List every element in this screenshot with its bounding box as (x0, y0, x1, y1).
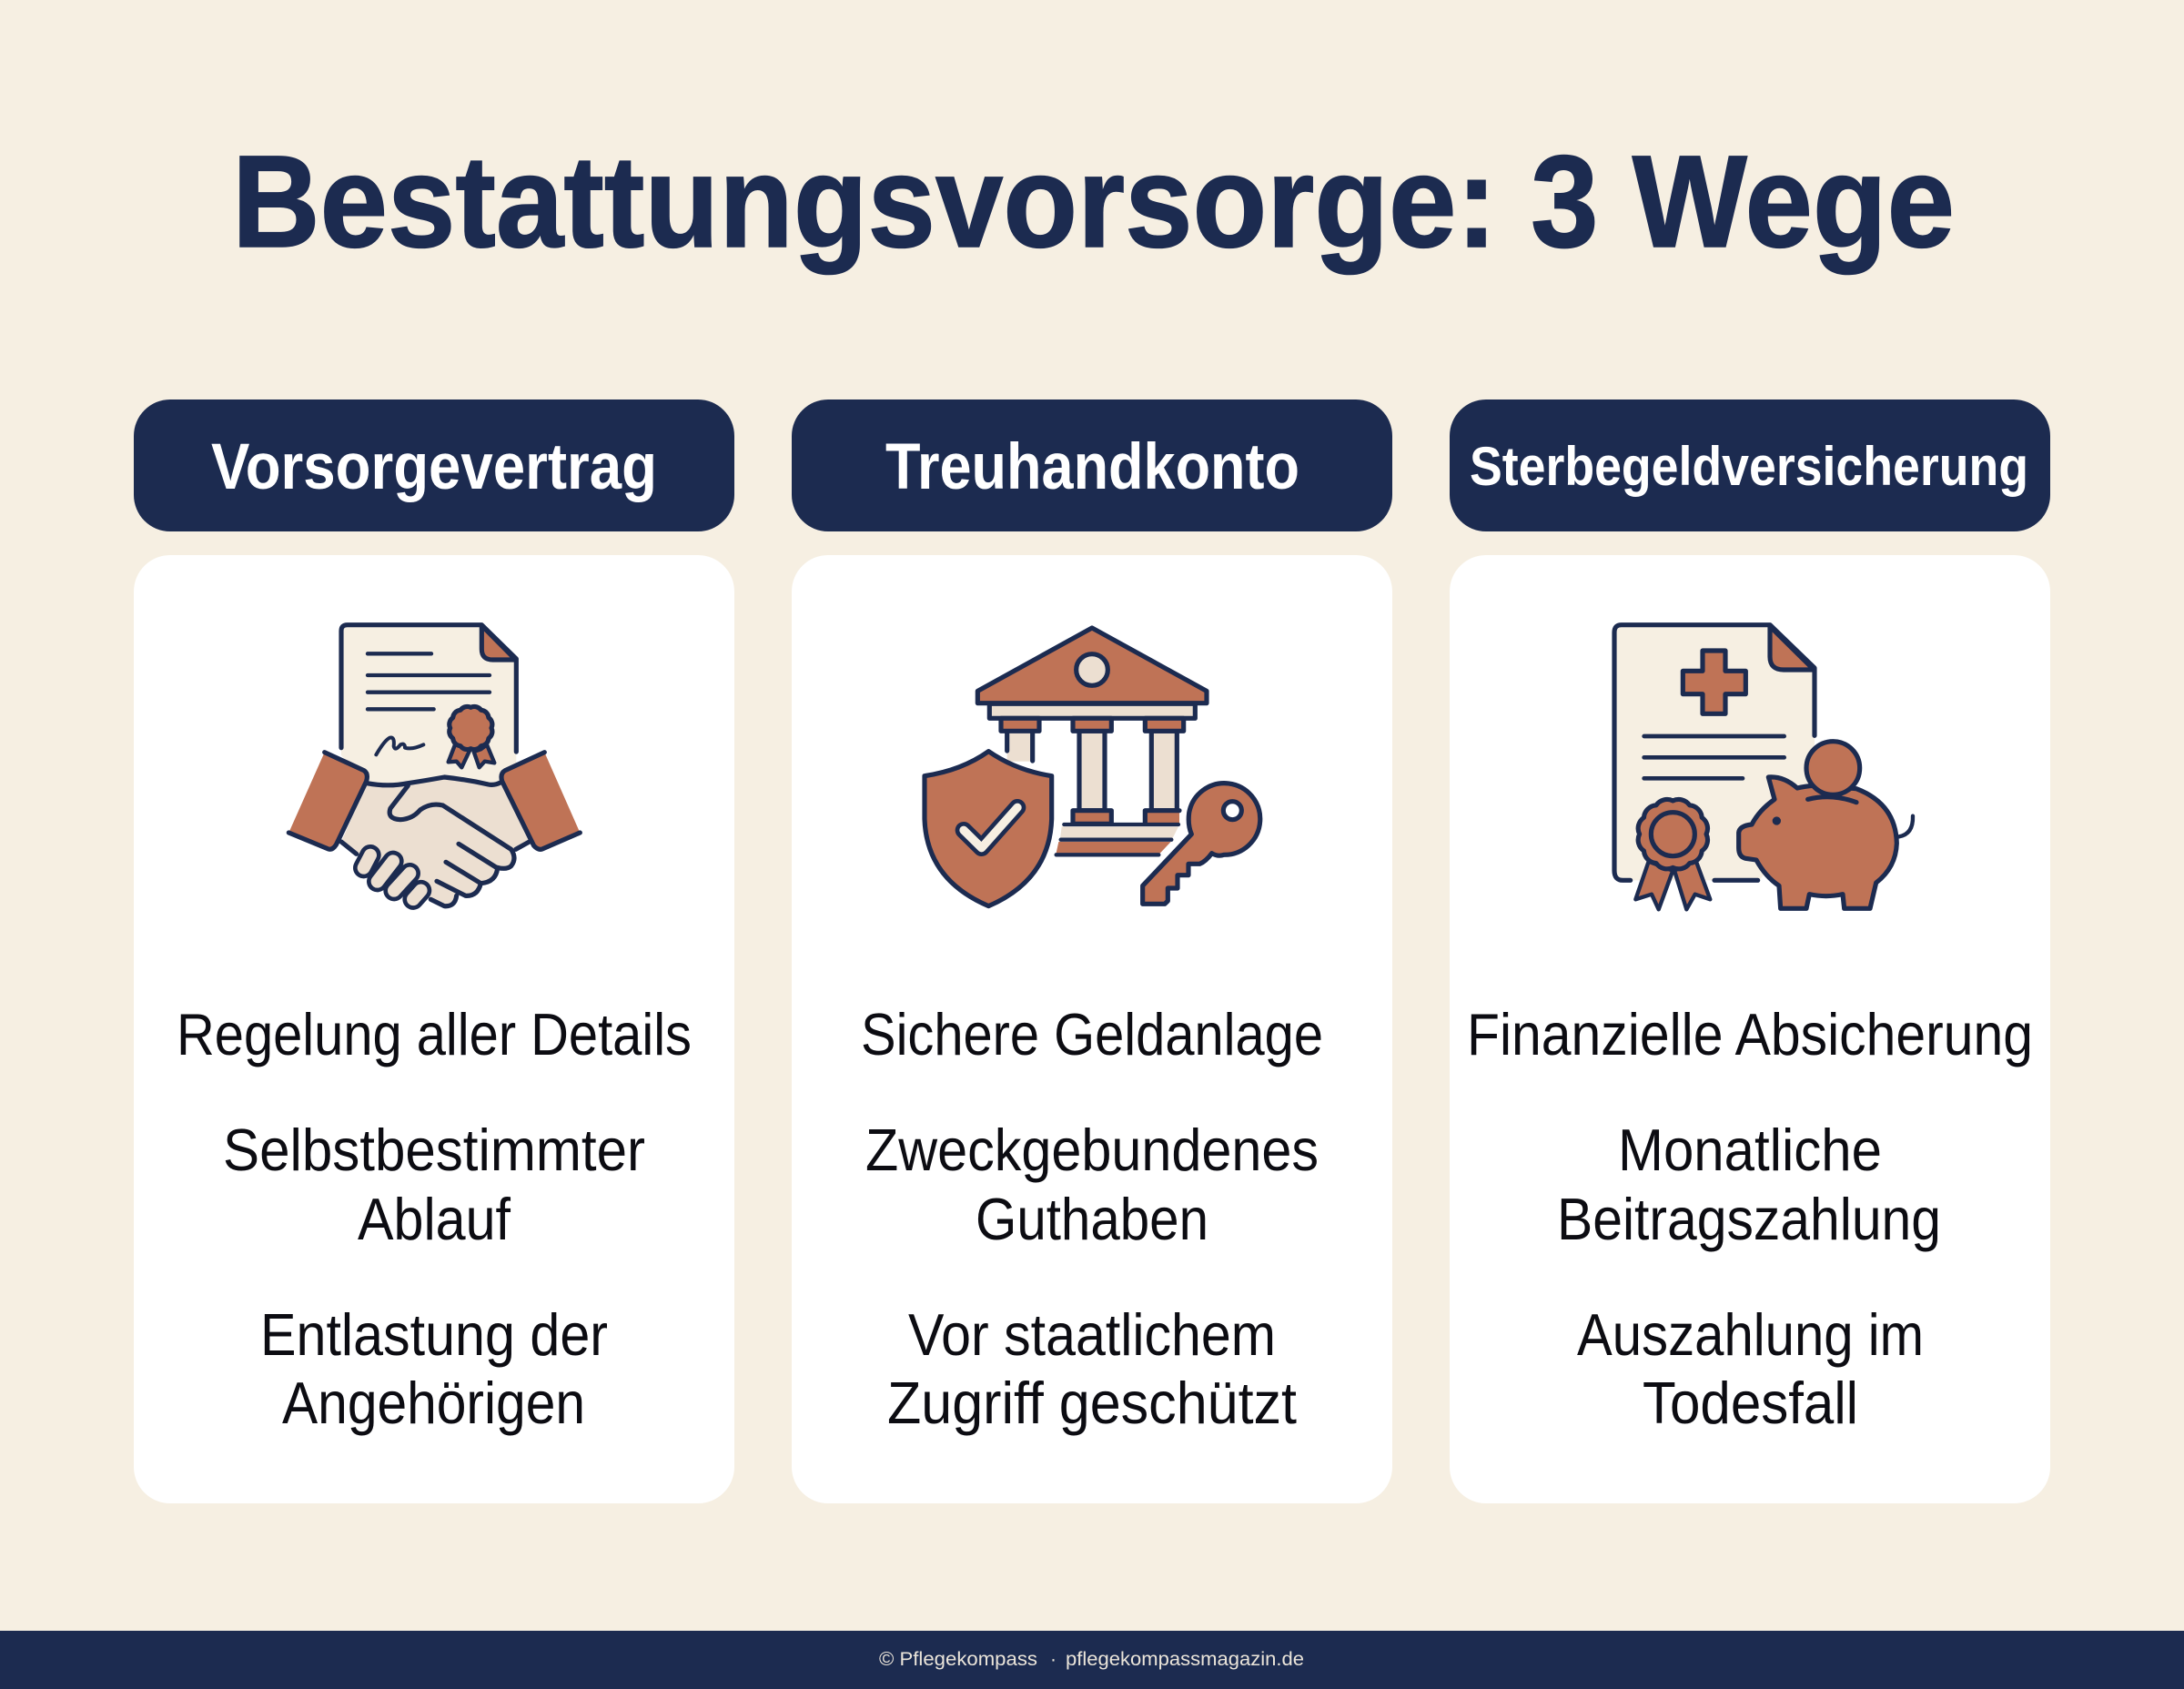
text: Treuhandkonto benefits (861, 1001, 1323, 1436)
footer: · (1050, 1649, 1057, 1670)
heading pill: Vorsorgevertrag: Vorsorgevertrag (211, 431, 657, 503)
heading pill: Treuhandkonto: Treuhandkonto (885, 431, 1299, 503)
panel: Sterbegeldversicherung (1450, 399, 2050, 1503)
card body: Treuhandkonto (792, 555, 1392, 1503)
text: Vorsorgevertrag benefits: Regelung aller Details (177, 1001, 692, 1067)
text: Treuhandkonto benefits: Sichere Geldanlage (861, 1001, 1323, 1067)
icon: insurance document and piggy bank (1614, 625, 1913, 909)
text: Sterbegeldversicherung benefits: Auszahlung im (1577, 1301, 1924, 1368)
text: Sterbegeldversicherung benefits: Finanzielle Absicherung (1467, 1001, 2033, 1067)
text: Vorsorgevertrag benefits: Entlastung der (260, 1301, 608, 1368)
card body: Sterbegeldversicherung (1450, 555, 2050, 1503)
title: Bestattungsvorsorge: 3 Wege (232, 128, 1955, 275)
icon: bank, shield and key (925, 628, 1260, 906)
text: Vorsorgevertrag benefits: Angehörigen (282, 1370, 585, 1436)
text: Sterbegeldversicherung benefits: Monatliche (1618, 1117, 1882, 1183)
heading pill: Sterbegeldversicherung (1450, 399, 2050, 531)
heading pill: Treuhandkonto (792, 399, 1392, 531)
footer: pflegekompassmagazin.de (1066, 1649, 1304, 1670)
text: Vorsorgevertrag benefits: Ablauf (358, 1186, 511, 1252)
text: Vorsorgevertrag benefits (177, 1001, 692, 1436)
footer: © Pflegekompass (879, 1649, 1037, 1670)
text: Treuhandkonto benefits: Vor staatlichem (908, 1301, 1276, 1368)
text: Sterbegeldversicherung benefits (1467, 1001, 2033, 1436)
text: Vorsorgevertrag benefits: Selbstbestimmter (223, 1117, 645, 1183)
text: Sterbegeldversicherung benefits: Beitragszahlung (1557, 1186, 1941, 1252)
text: Treuhandkonto benefits: Zugriff geschützt (887, 1370, 1297, 1436)
text: Treuhandkonto benefits: Zweckgebundenes (865, 1117, 1319, 1183)
text: Treuhandkonto benefits: Guthaben (976, 1186, 1208, 1252)
panel: Treuhandkonto (792, 399, 1392, 1503)
text: Sterbegeldversicherung benefits: Todesfall (1643, 1370, 1858, 1436)
icon: contract and handshake (288, 625, 580, 906)
heading pill: Sterbegeldversicherung: Sterbegeldversicherung (1470, 436, 2028, 497)
footer (0, 1631, 2184, 1689)
card body: Vorsorgevertrag (134, 555, 734, 1503)
panel: Vorsorgevertrag (134, 399, 734, 1503)
heading pill: Vorsorgevertrag (134, 399, 734, 531)
